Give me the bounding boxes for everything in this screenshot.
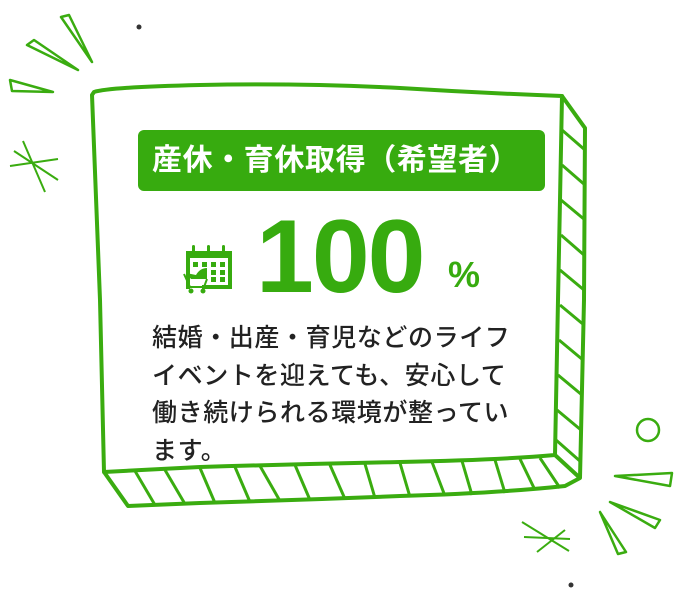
big number: 100 (256, 199, 424, 315)
icon: calendar with stroller (183, 245, 232, 294)
icon: left star (10, 141, 58, 192)
heading bar: 産休・育休取得（希望者） (152, 144, 519, 177)
description text (152, 318, 510, 466)
heading bar (138, 130, 545, 191)
hatching (135, 130, 585, 505)
description text: 働き続けられる環境が整ってい (152, 393, 509, 429)
dots (136, 24, 142, 30)
icon: bottom-right burst triangles (600, 473, 672, 554)
description text: 結婚・出産・育児などのライフ (152, 318, 510, 354)
percent sign: % (448, 254, 480, 295)
icon: top-left burst triangles (10, 15, 92, 92)
icon: right circle (637, 419, 659, 441)
box frame (92, 84, 585, 506)
icon: bottom-right star (522, 522, 570, 552)
description text: イベントを迎えても、安心して (152, 356, 506, 392)
description text: ます。 (152, 430, 226, 466)
